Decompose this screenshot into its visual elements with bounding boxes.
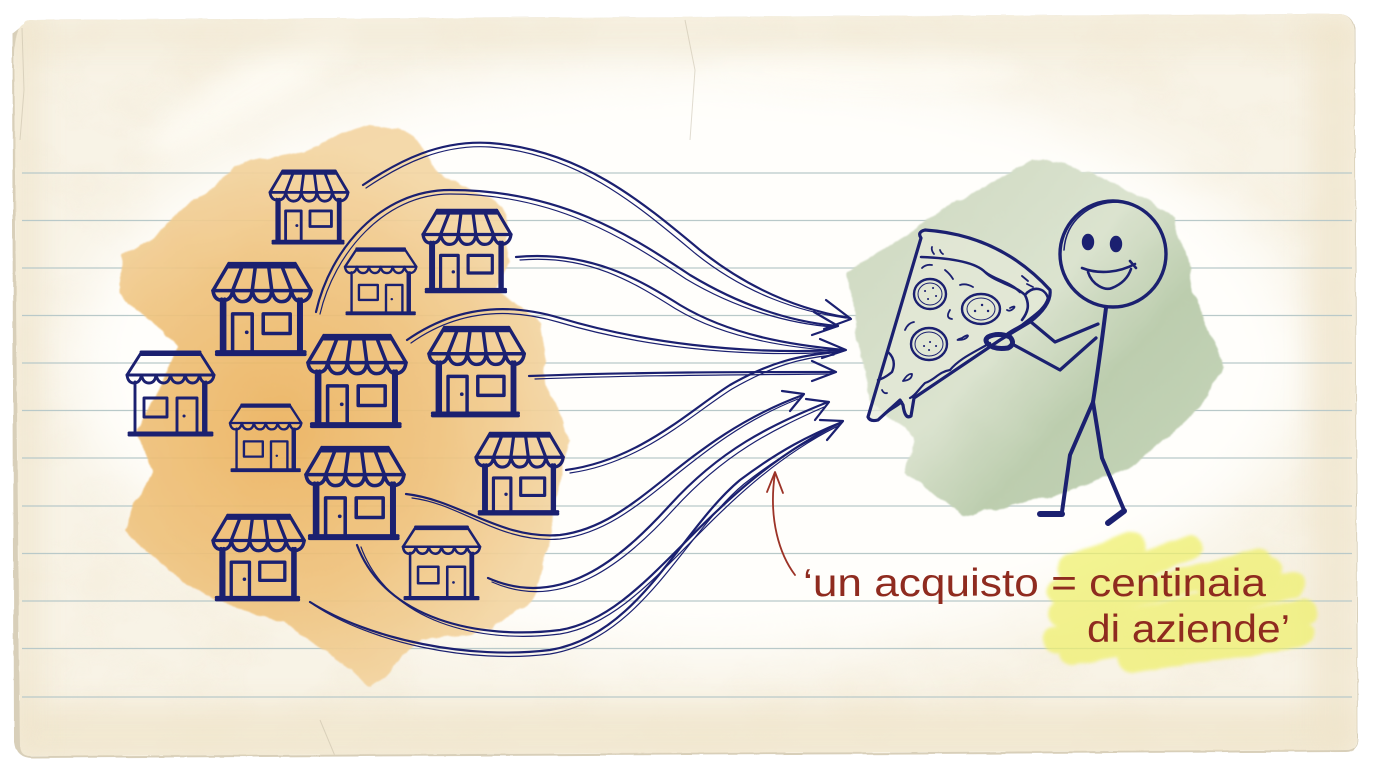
foot left xyxy=(1040,511,1062,517)
shop 1 xyxy=(270,171,348,243)
hand xyxy=(986,334,1013,348)
foot right xyxy=(1108,511,1124,523)
arrow from shop 5 xyxy=(529,361,836,381)
flow arrows from shops to pizza xyxy=(310,143,851,656)
pepperoni 1 xyxy=(914,279,946,309)
pepperoni 2 xyxy=(962,294,1000,324)
smile xyxy=(1082,261,1136,289)
arrow from shop 4 xyxy=(407,309,840,354)
arm lower xyxy=(1014,338,1096,370)
arrow from shop 3 xyxy=(316,190,838,335)
shops cluster xyxy=(127,171,563,600)
crust inner edge xyxy=(921,257,1048,336)
pizza slice xyxy=(868,230,1050,421)
shop 9 xyxy=(345,249,416,314)
shop 2 xyxy=(423,210,511,292)
pepperoni 4 xyxy=(878,352,894,380)
shop 4 xyxy=(308,336,406,426)
pepperoni 3 xyxy=(911,328,947,360)
arrow from lower shop 7 xyxy=(357,422,842,636)
handwritten caption xyxy=(803,562,1290,651)
shop 5 xyxy=(429,328,524,416)
ruled notebook lines xyxy=(22,173,1352,697)
shop 12 xyxy=(403,527,480,599)
orange watercolor wash xyxy=(120,125,570,688)
shop 7 xyxy=(306,448,404,538)
green watercolor wash xyxy=(850,158,1222,516)
eyes xyxy=(1084,236,1120,250)
shop 8 xyxy=(213,515,304,600)
arrow from shop 2 xyxy=(516,256,846,358)
arm upper xyxy=(1031,322,1098,342)
arrow from shop 12 xyxy=(488,399,829,592)
cheese drip edge xyxy=(878,343,990,420)
yellow highlighter scribble xyxy=(1056,545,1305,660)
arrow from shop 8 xyxy=(310,420,843,656)
arrow from shop 1 xyxy=(363,143,851,329)
cheese bits xyxy=(882,247,1033,393)
shop 10 xyxy=(127,352,214,435)
leg left xyxy=(1062,402,1093,512)
caption line 1: ‘un acquisto = centinaia xyxy=(803,562,1266,605)
stick figure xyxy=(986,201,1166,523)
body xyxy=(1093,308,1106,402)
arrow from shop 6 xyxy=(566,352,838,473)
shop 6 xyxy=(476,433,563,514)
shop 11 xyxy=(230,405,301,471)
shop 3 xyxy=(213,264,311,354)
leg right xyxy=(1093,402,1124,510)
caption line 2: di aziende’ xyxy=(1087,608,1290,651)
pizza body xyxy=(868,230,1050,421)
head xyxy=(1060,201,1166,307)
red annotation arrow xyxy=(767,472,795,575)
arrow from shop 7 xyxy=(406,391,804,539)
